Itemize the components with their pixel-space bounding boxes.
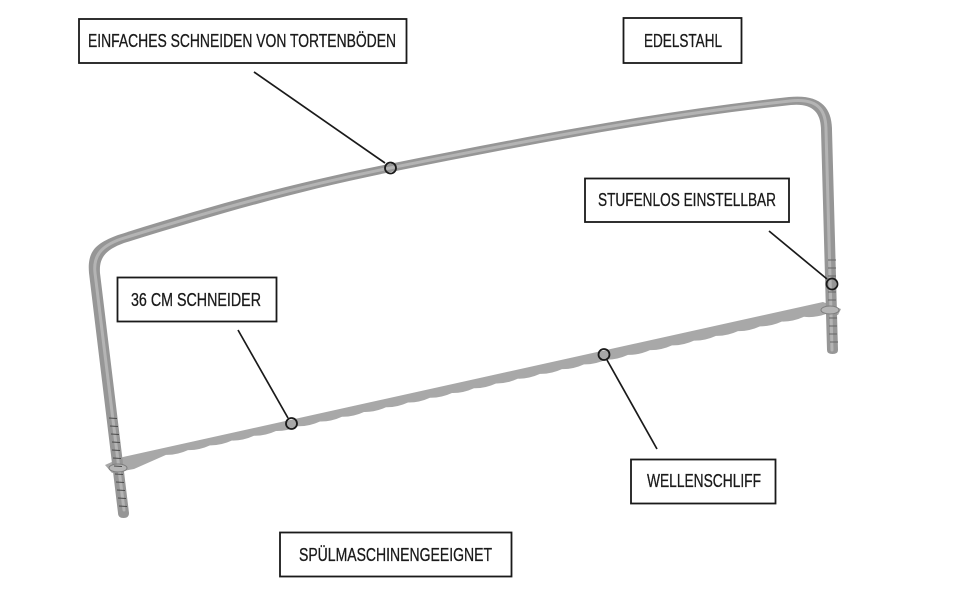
callout: WELLENSCHLIFF xyxy=(631,460,776,504)
right clamp xyxy=(821,306,839,314)
blade with wavy edge xyxy=(105,302,841,473)
leader line and marker: wavy edge xyxy=(598,349,657,449)
product: cake cutter xyxy=(89,97,841,518)
leader line and marker: top bow xyxy=(254,72,396,174)
callout: STUFENLOS EINSTELLBAR: STUFENLOS EINSTELLBAR xyxy=(598,190,776,210)
callout: EINFACHES SCHNEIDEN VON TORTENBÖDEN: EINFACHES SCHNEIDEN VON TORTENBÖDEN xyxy=(88,31,396,51)
leader line and marker: adjuster xyxy=(769,231,838,290)
wire frame tube xyxy=(89,97,838,518)
tube highlight xyxy=(95,100,832,510)
callout: EDELSTAHL: EDELSTAHL xyxy=(644,31,722,51)
left clamp xyxy=(109,464,127,472)
leader line and marker: blade size xyxy=(238,330,297,429)
callout: SPÜLMASCHINENGEEIGNET xyxy=(280,532,512,576)
callout: STUFENLOS EINSTELLBAR xyxy=(585,178,789,222)
callout: EDELSTAHL xyxy=(624,18,742,63)
right height scale marks xyxy=(828,260,838,342)
callout: EINFACHES SCHNEIDEN VON TORTENBÖDEN xyxy=(79,19,406,63)
callout: WELLENSCHLIFF: WELLENSCHLIFF xyxy=(647,471,761,491)
callout: 36 CM SCHNEIDER xyxy=(118,278,276,322)
callout: 36 CM SCHNEIDER: 36 CM SCHNEIDER xyxy=(131,290,261,310)
callout: SPÜLMASCHINENGEEIGNET: SPÜLMASCHINENGEEIGNET xyxy=(299,545,492,565)
left height scale marks xyxy=(109,418,127,506)
